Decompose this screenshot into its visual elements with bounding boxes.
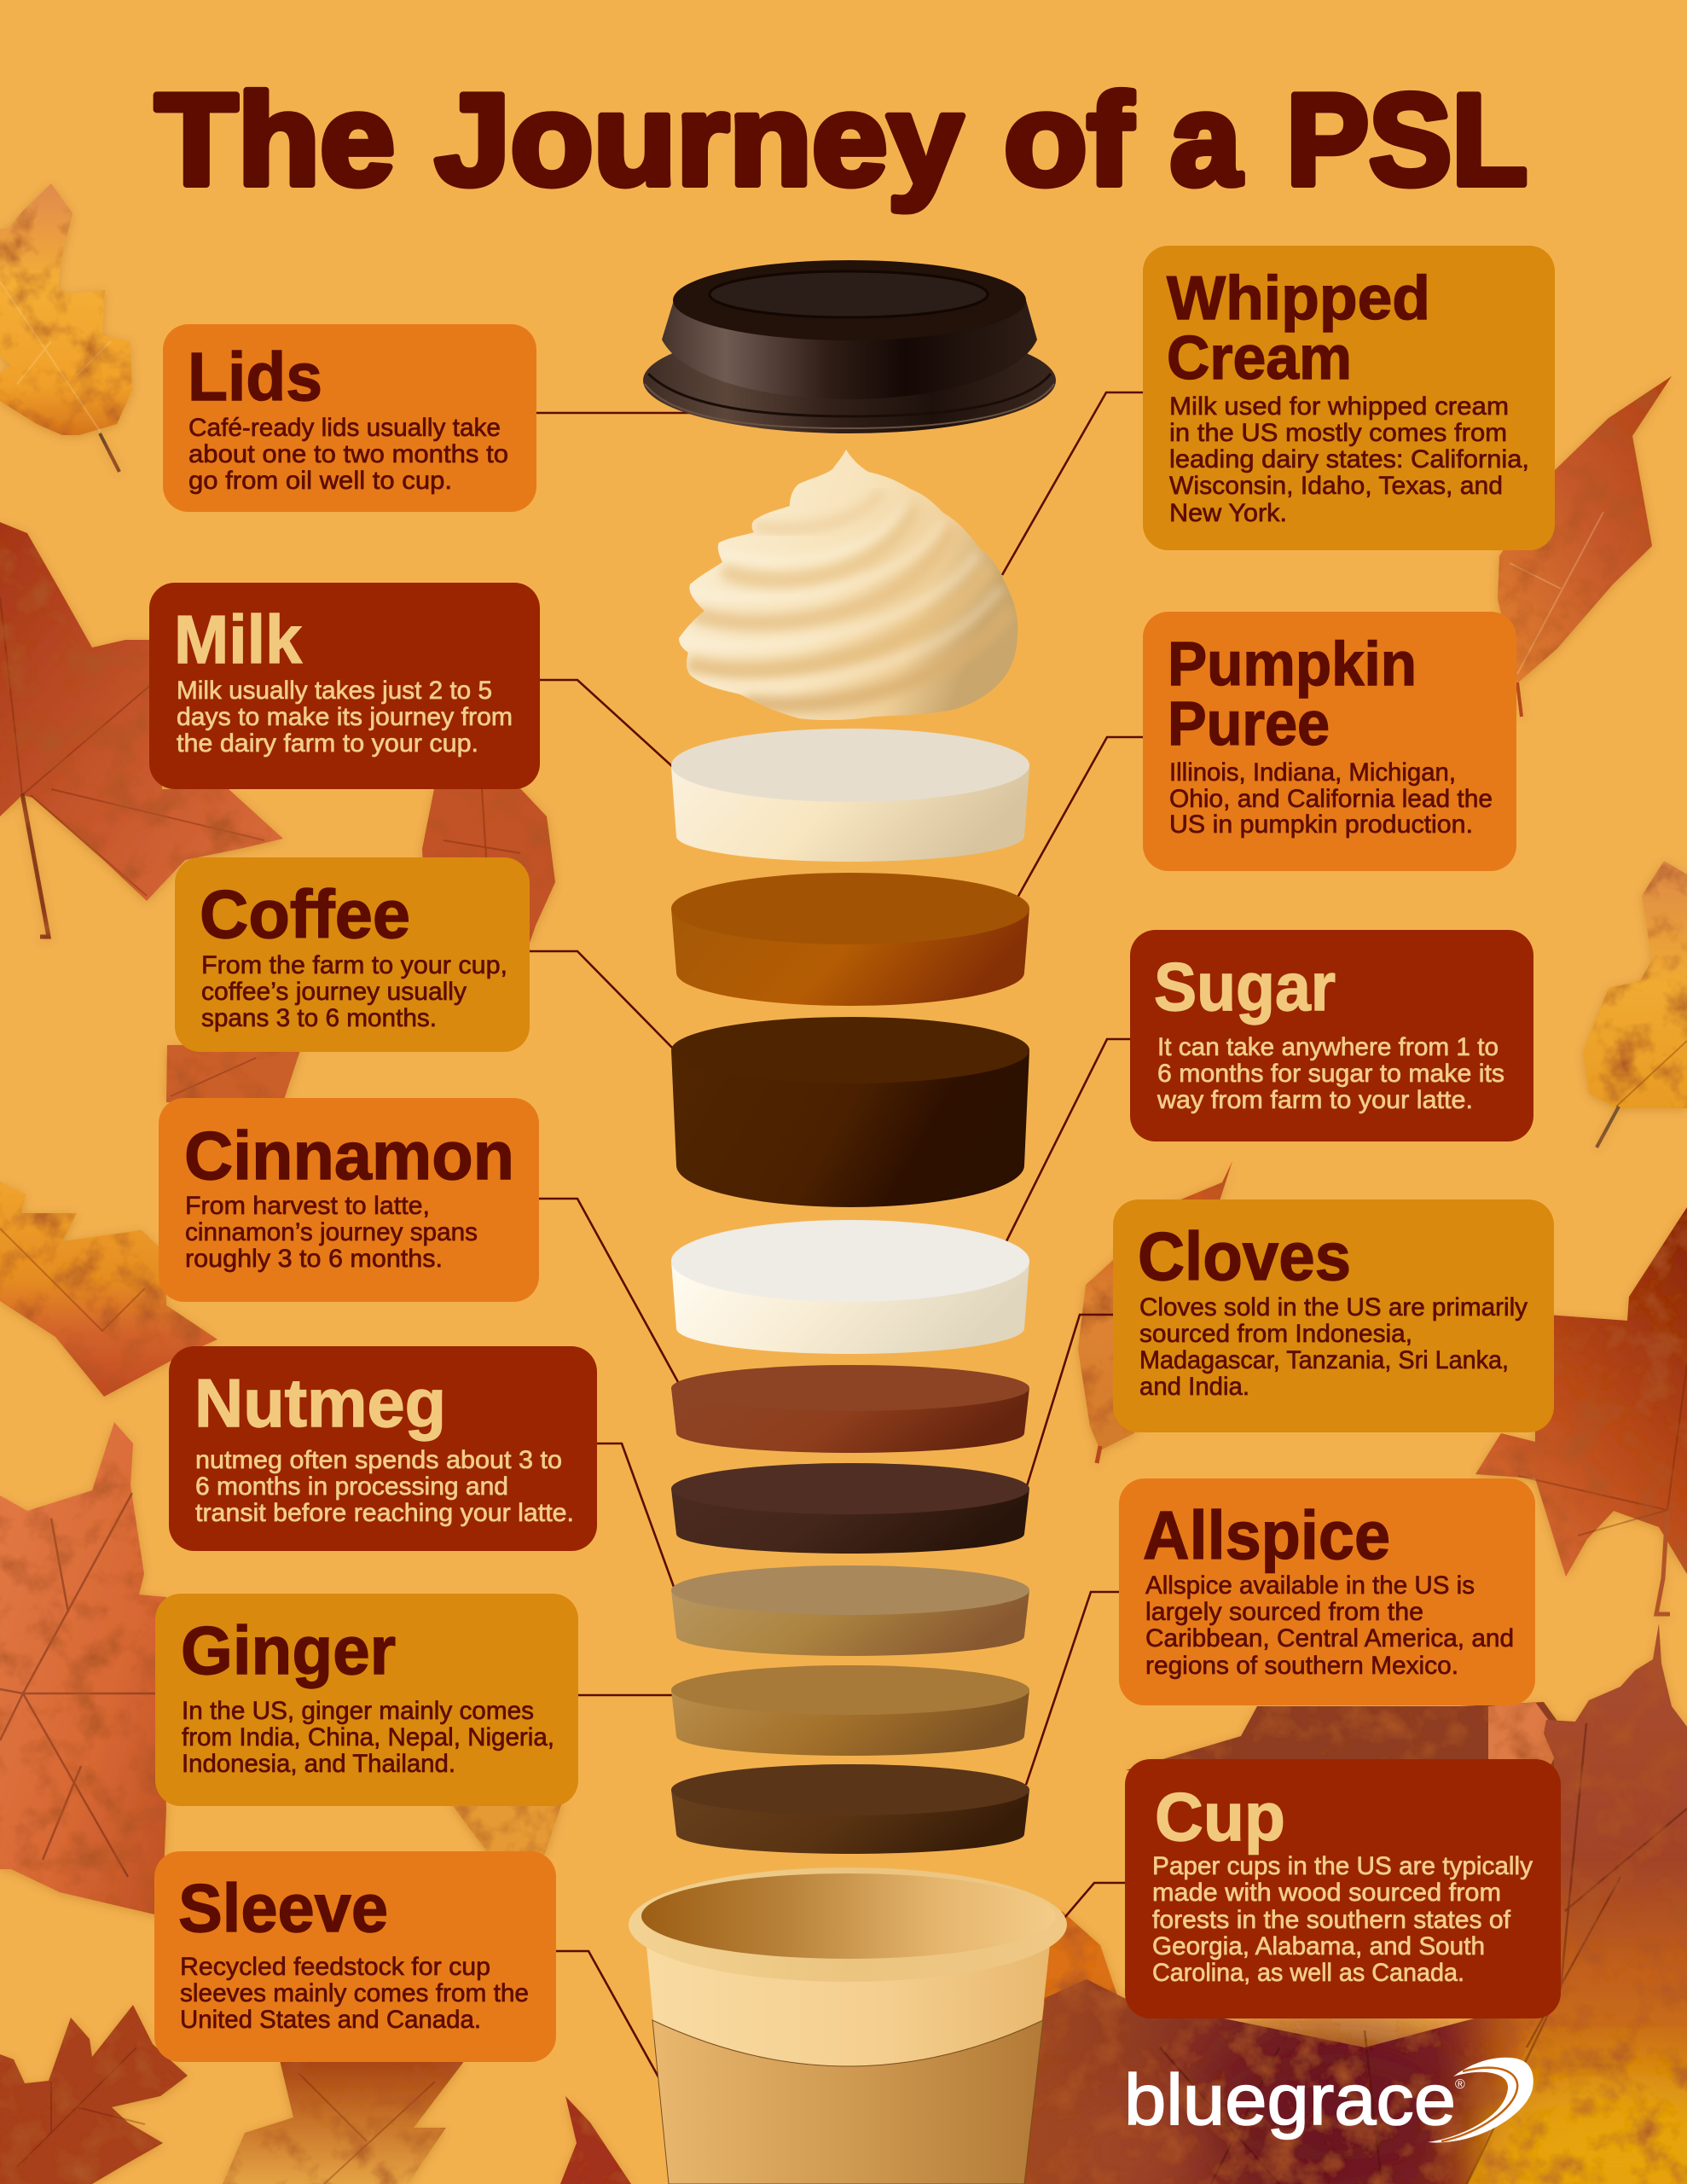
panel: nutmeg: transit before reaching your latte. bbox=[195, 1499, 574, 1527]
panel: cloves: Cloves sold in the US are primarily bbox=[1139, 1293, 1528, 1321]
disc: nutmeg bbox=[671, 1565, 1029, 1656]
panel: cloves: Cloves bbox=[1138, 1218, 1351, 1294]
title: Journey bbox=[435, 67, 963, 212]
panel: lids: Café-ready lids usually take bbox=[188, 414, 501, 442]
panel: pumpkin puree bbox=[1143, 612, 1516, 871]
panel: allspice: Allspice available in the US is bbox=[1145, 1571, 1475, 1600]
panel: cup: Cup bbox=[1155, 1779, 1285, 1855]
disc: milk bbox=[671, 729, 1029, 862]
panel: cinnamon bbox=[159, 1098, 539, 1302]
panel: lids: go from oil well to cup. bbox=[188, 467, 452, 495]
leaf: orange behind cup bbox=[1032, 1911, 1119, 2005]
panel: allspice: regions of southern Mexico. bbox=[1145, 1652, 1458, 1680]
panel: sugar bbox=[1130, 930, 1533, 1141]
panel: whipped cream: Cream bbox=[1167, 324, 1352, 392]
panel: ginger: Ginger bbox=[181, 1612, 396, 1688]
panel: whipped cream: leading dairy states: California, bbox=[1169, 445, 1529, 473]
panel: sugar: 6 months for sugar to make its bbox=[1157, 1060, 1504, 1088]
panel: lids bbox=[163, 324, 536, 512]
panel: pumpkin puree: US in pumpkin production. bbox=[1169, 810, 1473, 839]
panel: cup: forests in the southern states of bbox=[1152, 1906, 1511, 1934]
title: PSL bbox=[1286, 67, 1528, 212]
lid bbox=[643, 260, 1056, 433]
panel: sleeve: sleeves mainly comes from the bbox=[180, 1979, 529, 2007]
panel: whipped cream bbox=[1143, 246, 1555, 550]
panel: milk bbox=[149, 583, 540, 789]
panel: pumpkin puree: Pumpkin bbox=[1168, 630, 1417, 699]
panel: cup: Georgia, Alabama, and South bbox=[1152, 1932, 1485, 1960]
panel: sleeve: United States and Canada. bbox=[180, 2006, 481, 2034]
panel: sleeve: Sleeve bbox=[178, 1870, 388, 1946]
panel: milk: Milk usually takes just 2 to 5 bbox=[177, 677, 492, 705]
panel: sugar: way from farm to your latte. bbox=[1157, 1086, 1473, 1114]
leaf: large red left bbox=[0, 522, 283, 937]
panel: lids: Lids bbox=[188, 339, 322, 415]
disc: ginger bbox=[671, 1665, 1029, 1756]
cup sleeve bbox=[652, 2020, 1043, 2184]
logo: bluegrace: ® bbox=[1455, 2077, 1465, 2092]
panel: cinnamon: cinnamon’s journey spans bbox=[185, 1218, 478, 1246]
panel: coffee: From the farm to your cup, bbox=[201, 951, 507, 979]
title bbox=[155, 67, 1528, 212]
disc: sugar bbox=[671, 1220, 1029, 1354]
panel: cloves: Madagascar, Tanzania, Sri Lanka, bbox=[1139, 1346, 1509, 1374]
panel: milk: days to make its journey from bbox=[177, 703, 513, 731]
panel: ginger: Indonesia, and Thailand. bbox=[182, 1750, 455, 1778]
panel: nutmeg: 6 months in processing and bbox=[195, 1472, 508, 1501]
leaf: large orange left bbox=[0, 1422, 166, 1916]
leaf: behind milk and coffee bbox=[422, 785, 555, 943]
panel: cup: Carolina, as well as Canada. bbox=[1152, 1959, 1464, 1987]
panel: sleeve bbox=[154, 1851, 556, 2062]
panel: nutmeg: nutmeg often spends about 3 to bbox=[195, 1446, 562, 1474]
panel: whipped cream: Wisconsin, Idaho, Texas, and bbox=[1169, 472, 1503, 500]
panel: cinnamon: Cinnamon bbox=[184, 1118, 514, 1194]
panel: sugar: Sugar bbox=[1154, 949, 1336, 1025]
leaf: bottom left bbox=[0, 2005, 188, 2184]
panel: pumpkin puree: Ohio, and California lead the bbox=[1169, 785, 1493, 813]
panel: ginger: from India, China, Nepal, Nigeria, bbox=[182, 1723, 554, 1751]
disc: cloves bbox=[671, 1463, 1029, 1554]
leaf: top right red bbox=[1498, 376, 1672, 717]
panel: nutmeg bbox=[169, 1346, 597, 1551]
panel: allspice: largely sourced from the bbox=[1145, 1598, 1423, 1626]
logo: bluegrace: bluegrace bbox=[1124, 2059, 1456, 2140]
title: The bbox=[155, 67, 395, 212]
panel: whipped cream: Milk used for whipped cream bbox=[1169, 392, 1509, 421]
leaf: bottom dark red bbox=[560, 2096, 631, 2184]
panel: milk: Milk bbox=[174, 601, 302, 677]
leaf: below coffee box bbox=[166, 1045, 302, 1102]
leaf: yellow top left bbox=[0, 183, 132, 472]
whipped cream bbox=[679, 450, 1017, 720]
panel: lids: about one to two months to bbox=[188, 440, 508, 468]
panel: pumpkin puree: Puree bbox=[1168, 690, 1330, 758]
panel: cinnamon: From harvest to latte, bbox=[185, 1192, 430, 1220]
leaf: under ginger box bbox=[449, 1800, 563, 1856]
panel: cloves: and India. bbox=[1139, 1373, 1249, 1401]
panel: cinnamon: roughly 3 to 6 months. bbox=[185, 1245, 443, 1273]
panel: whipped cream: Whipped bbox=[1167, 264, 1430, 333]
panel: milk: the dairy farm to your cup. bbox=[177, 729, 478, 758]
panel: whipped cream: New York. bbox=[1169, 499, 1287, 527]
panel: allspice: Allspice bbox=[1143, 1497, 1390, 1573]
leaf: bottom centre bbox=[223, 2060, 465, 2184]
cup rim bbox=[629, 1867, 1067, 1982]
panel: coffee bbox=[175, 857, 530, 1052]
panel: cloves bbox=[1113, 1199, 1554, 1432]
disc: pumpkin puree bbox=[671, 873, 1029, 1006]
leaf: band above cup box bbox=[1126, 1702, 1565, 1770]
leaf: behind cloves box bbox=[1078, 1161, 1232, 1463]
title: a bbox=[1170, 67, 1242, 212]
panel: pumpkin puree: Illinois, Indiana, Michigan, bbox=[1169, 758, 1456, 787]
panel: nutmeg: Nutmeg bbox=[194, 1365, 446, 1441]
disc: allspice bbox=[671, 1764, 1029, 1854]
panel: allspice: Caribbean, Central America, and bbox=[1145, 1624, 1514, 1653]
leaf: yellow and orange left bbox=[0, 1182, 217, 1397]
panel: cup: made with wood sourced from bbox=[1152, 1879, 1501, 1907]
disc: cinnamon bbox=[671, 1365, 1029, 1453]
panel: cup bbox=[1125, 1759, 1561, 2018]
panel: allspice bbox=[1119, 1478, 1535, 1705]
leaf: large right bbox=[1475, 1207, 1687, 1614]
panel: sleeve: Recycled feedstock for cup bbox=[180, 1953, 490, 1981]
leaf: yellow right bbox=[1583, 861, 1687, 1147]
title: of bbox=[1004, 67, 1133, 212]
cup wall bbox=[646, 1937, 1051, 2184]
panel: ginger: In the US, ginger mainly comes bbox=[182, 1697, 534, 1725]
disc: coffee bbox=[671, 1017, 1029, 1207]
panel: coffee: coffee’s journey usually bbox=[201, 978, 467, 1006]
paper cup with sleeve bbox=[629, 1867, 1067, 2184]
panel: coffee: spans 3 to 6 months. bbox=[201, 1004, 437, 1032]
panel: cloves: sourced from Indonesia, bbox=[1139, 1320, 1412, 1348]
panel: whipped cream: in the US mostly comes from bbox=[1169, 419, 1507, 447]
leaves: large bottom right cluster bbox=[1023, 1623, 1687, 2184]
panel: ginger bbox=[155, 1594, 578, 1806]
connector lines bbox=[530, 392, 1143, 2082]
panel: sugar: It can take anywhere from 1 to bbox=[1157, 1033, 1499, 1061]
panel: coffee: Coffee bbox=[200, 876, 410, 952]
panel: cup: Paper cups in the US are typically bbox=[1152, 1852, 1533, 1880]
